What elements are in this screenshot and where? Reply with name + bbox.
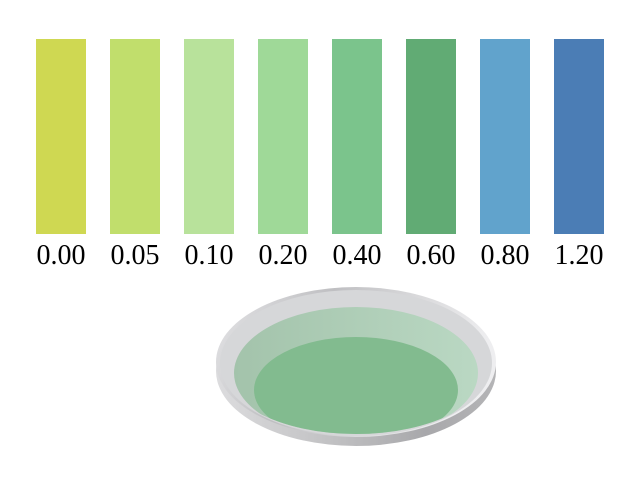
swatch 0.10: [184, 39, 234, 234]
swatch 0.20: [258, 39, 308, 234]
dish rim: [216, 287, 496, 437]
swatch 0.40: [332, 39, 382, 234]
swatch 0.80: [480, 39, 530, 234]
label 0.05: 0.05: [110, 240, 160, 271]
label 1.20: 1.20: [554, 240, 604, 271]
swatch 0.00: [36, 39, 86, 234]
label 0.40: 0.40: [332, 240, 382, 271]
label 0.00: 0.00: [36, 240, 86, 271]
swatch 0.60: [406, 39, 456, 234]
label 0.10: 0.10: [184, 240, 234, 271]
swatch 0.05: [110, 39, 160, 234]
icon: petri dish with green solution: [216, 287, 496, 446]
label 0.80: 0.80: [480, 240, 530, 271]
dish inner face: [220, 290, 492, 436]
swatch 1.20: [554, 39, 604, 234]
label 0.20: 0.20: [258, 240, 308, 271]
liquid surface: [234, 307, 478, 443]
dish outer wall: [216, 296, 496, 446]
label 0.60: 0.60: [406, 240, 456, 271]
dish bottom liquid: [254, 337, 458, 443]
